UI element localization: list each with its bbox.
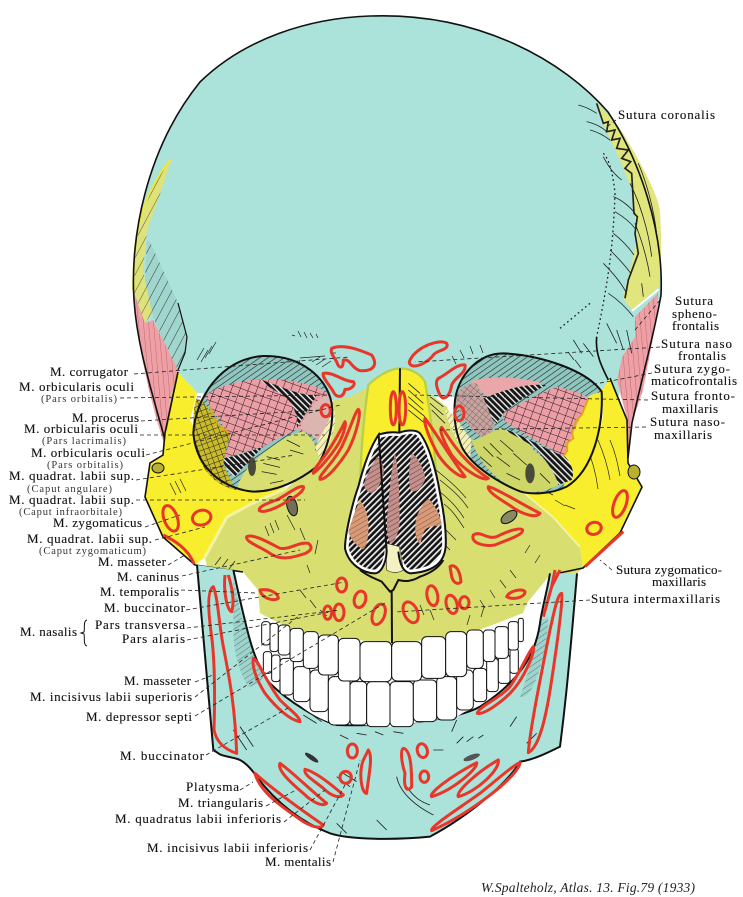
right labels: maxillaris xyxy=(654,427,712,442)
yellow rim left xyxy=(133,160,170,290)
concha lower right xyxy=(415,498,442,544)
brow hatching xyxy=(197,331,581,373)
left labels: (Caput infraorbitale) xyxy=(19,507,122,518)
left labels: M. quadrat. labii sup. xyxy=(27,531,152,546)
left labels: (Pars lacrimalis) xyxy=(42,436,126,447)
orange suture left xyxy=(166,374,177,430)
pink wing xyxy=(205,379,330,458)
aperture outline xyxy=(345,430,446,573)
lateral wall xyxy=(193,398,237,490)
mandible outline xyxy=(197,565,577,839)
left labels: M. quadratus labii inferioris xyxy=(115,811,281,826)
left labels: M. buccinator xyxy=(104,600,186,615)
left labels: (Pars orbitalis) xyxy=(47,460,124,471)
left labels: M. depressor septi xyxy=(86,709,192,724)
dotted temporal line right xyxy=(560,153,615,337)
concha lower left xyxy=(348,500,368,549)
zygomatic outline xyxy=(145,372,642,575)
right orbit xyxy=(445,353,602,493)
right labels: Sutura zygomatico- xyxy=(616,562,722,577)
right labels: Sutura naso- xyxy=(650,414,725,429)
vomer base xyxy=(386,543,403,572)
left labels: M. orbicularis oculi xyxy=(19,379,134,394)
pink bone right xyxy=(617,293,658,458)
temporal line left xyxy=(178,303,187,370)
maxilla xyxy=(145,368,642,650)
source credit: W.Spalteholz, Atlas. 13. Fig.79 (1933) xyxy=(481,880,696,895)
left labels: (Caput angulare) xyxy=(27,484,112,495)
pink top xyxy=(470,377,543,403)
upper teeth xyxy=(262,618,523,682)
left labels: (Pars orbitalis) xyxy=(41,394,118,405)
left labels: M. nasalis xyxy=(20,624,77,639)
zygomatic nub right xyxy=(628,465,640,479)
left labels: M. incisivus labii superioris xyxy=(30,689,192,704)
left labels: Pars alaris xyxy=(122,631,185,646)
cranium outline xyxy=(133,16,661,458)
right labels xyxy=(591,107,737,606)
orbit rim xyxy=(454,353,602,493)
temporal strip left xyxy=(133,158,172,323)
ramus hatch right xyxy=(520,617,548,697)
left labels: M. quadrat. labii sup. xyxy=(9,492,134,507)
infraorbital foramen right xyxy=(499,508,519,526)
right labels: maxillaris xyxy=(662,401,718,416)
slit xyxy=(525,463,535,483)
left labels: M. mentalis xyxy=(265,854,331,869)
cream hatch xyxy=(445,410,472,460)
right labels: Sutura fronto- xyxy=(651,388,735,403)
left labels: Pars transversa xyxy=(95,617,185,632)
orbit rim xyxy=(193,356,332,492)
left labels: M. procerus xyxy=(72,410,139,425)
inferior fissure xyxy=(223,447,263,477)
leader lines xyxy=(120,120,660,862)
mental foramen right xyxy=(463,752,481,763)
right labels: Sutura naso xyxy=(661,336,732,351)
temporal hatch left xyxy=(145,240,187,370)
lower fissure xyxy=(500,427,573,485)
right labels: Sutura xyxy=(675,293,713,308)
right labels: frontalis xyxy=(678,348,726,363)
gray wedge xyxy=(455,383,495,438)
lateral wall yellow xyxy=(563,392,602,488)
left labels: M. zygomaticus xyxy=(53,515,142,530)
pink bone left xyxy=(133,290,178,447)
right labels: maxillaris xyxy=(652,574,706,589)
left labels: M. orbicularis oculi xyxy=(31,445,145,460)
left labels xyxy=(9,364,331,869)
right labels: Sutura intermaxillaris xyxy=(591,591,720,606)
left labels: M. quadrat. labii sup. xyxy=(9,468,134,483)
septum xyxy=(387,453,400,544)
cranium xyxy=(133,16,661,458)
left labels: M. temporalis xyxy=(100,584,179,599)
maxilla rim left xyxy=(205,488,287,557)
right temporal hatching xyxy=(560,103,657,380)
left labels: M. masseter xyxy=(98,554,167,569)
right labels: Sutura zygo- xyxy=(654,361,730,376)
ramus hatch left xyxy=(233,577,263,687)
nasal hatch xyxy=(408,383,453,470)
mental foramen left xyxy=(304,751,320,764)
left labels: M. incisivus labii inferioris xyxy=(147,840,308,855)
gray wedge xyxy=(300,393,331,442)
cream hatch xyxy=(315,408,335,460)
floor hatch xyxy=(480,440,550,483)
left orbit xyxy=(193,356,335,492)
concha upper left xyxy=(364,457,384,493)
slit xyxy=(248,457,256,476)
left labels: M. masseter xyxy=(124,673,192,688)
pink wing xyxy=(503,387,588,457)
red muscle origins left face xyxy=(160,347,375,600)
maxilla hatching xyxy=(170,440,620,625)
right labels: maticofrontalis xyxy=(651,373,737,388)
white seam right xyxy=(632,289,659,311)
red muscle origins right face xyxy=(390,342,630,583)
lower teeth xyxy=(263,648,518,727)
coronal suture xyxy=(597,103,638,298)
orange suture xyxy=(563,398,588,457)
temporal strip right xyxy=(597,103,661,310)
right zygomatic bone xyxy=(523,378,642,568)
zygomatic nub left xyxy=(152,463,164,473)
chin hatching xyxy=(233,713,537,833)
orange suture xyxy=(210,407,229,433)
anterior nasal spine xyxy=(360,560,443,643)
red muscle origins lower xyxy=(209,570,562,831)
infraorbital foramen left xyxy=(285,495,299,517)
right labels: frontalis xyxy=(672,318,719,333)
left labels: M. caninus xyxy=(117,569,179,584)
left labels: M. orbicularis oculi xyxy=(24,421,138,436)
left zygomatic bone xyxy=(145,372,287,565)
nasal bones xyxy=(360,368,453,500)
nasal midline suture xyxy=(396,368,403,433)
left labels: M. buccinator xyxy=(120,748,205,763)
floor hatch xyxy=(262,440,303,483)
tooth backing xyxy=(262,618,523,727)
brace xyxy=(81,620,87,646)
left labels: M. corrugator xyxy=(50,364,129,379)
orbit floor xyxy=(472,428,558,492)
dark fissure xyxy=(260,379,317,428)
left labels: Platysma xyxy=(186,779,239,794)
temporal line right xyxy=(596,337,608,380)
concha upper right xyxy=(409,453,425,491)
mandible xyxy=(197,565,577,839)
right labels: Sutura coronalis xyxy=(618,107,715,122)
dark fissure xyxy=(480,385,547,423)
maxilla rim right xyxy=(523,492,580,547)
nasal aperture xyxy=(345,368,446,643)
orbit floor xyxy=(237,432,320,492)
left labels: (Caput zygomaticum) xyxy=(39,546,146,557)
left labels: M. triangularis xyxy=(178,795,263,810)
right labels: spheno- xyxy=(672,306,717,321)
